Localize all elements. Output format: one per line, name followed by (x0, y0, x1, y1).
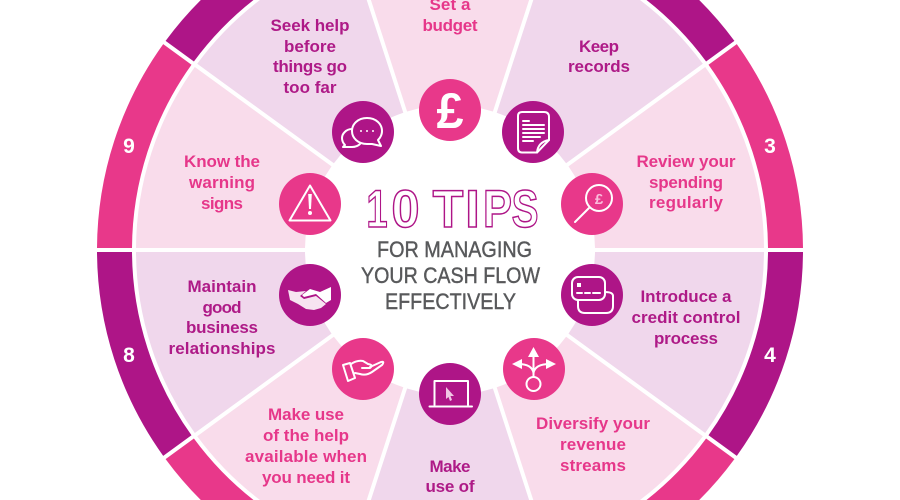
number 3: 3 (764, 135, 776, 158)
panel: tip 2 keep records (497, 0, 734, 163)
icon: warning triangle (279, 173, 341, 235)
text: diversify your revenue streams: revenue (560, 435, 626, 454)
title: 10 tips: 0 (391, 179, 420, 238)
icon: credit cards (561, 264, 623, 326)
panel: tip 9 know the warning signs (97, 44, 341, 248)
title: 10 tips: P (483, 180, 512, 239)
text: keep records: Keep (579, 37, 619, 56)
icon: laptop (419, 363, 481, 425)
panel: tip 8 maintain good business relationships (97, 252, 341, 456)
icon: magnifying glass (561, 173, 623, 235)
text: introduce a credit control process: Introduce a (640, 287, 732, 306)
text: seek help before things go too far: before (284, 37, 336, 56)
text: make use of the help available: available when (245, 447, 367, 466)
title: 10 tips (366, 179, 538, 239)
text: know the warning signs: signs (201, 194, 243, 213)
text: make use of the help available: Make use (268, 405, 344, 424)
icon: diverging arrows (503, 338, 565, 400)
icon: pound sign (419, 79, 481, 141)
icon: speech bubbles (332, 101, 394, 163)
subtitle: YOUR CASH FLOW (361, 263, 540, 288)
text: make use of: use of (426, 477, 475, 496)
number 9: 9 (123, 135, 135, 158)
text: make use of the help available: you need it (262, 468, 350, 487)
title: 10 tips: I (465, 180, 480, 239)
text: introduce a credit control process: credit control (632, 308, 740, 327)
title: 10 tips: S (512, 179, 538, 238)
panel: tip 1 set a budget (371, 0, 529, 141)
text: make use of the help available: of the help (263, 426, 349, 445)
text: review your spending regularly: regularly (649, 193, 724, 212)
subtitle: FOR MANAGING (377, 237, 532, 262)
text: maintain good business relationships: business (186, 318, 258, 337)
number 4: 4 (764, 344, 776, 367)
title: 10 tips: 1 (366, 179, 388, 238)
text: review your spending regularly: spending (649, 173, 723, 192)
text: maintain good business relationships: Maintain (188, 277, 256, 296)
text: maintain good business relationships: relationships (168, 339, 276, 358)
icon: open hand (332, 338, 394, 400)
text: know the warning signs: warning (188, 173, 255, 192)
text: keep records: records (568, 57, 630, 76)
title: 10 tips: T (433, 179, 464, 238)
text: seek help before things go too far: Seek help (270, 16, 350, 35)
text: seek help before things go too far: things go (273, 57, 347, 76)
panel: tip 3 review your spending (561, 44, 803, 248)
text: know the warning signs: Know the (184, 152, 260, 171)
text: diversify your revenue streams: Diversify your (536, 414, 650, 433)
panel: tip 5 diversify (497, 337, 734, 500)
text: introduce a credit control process: process (654, 329, 718, 348)
text: maintain good business relationships: good (202, 298, 242, 317)
text: review your spending regularly: Review your (636, 152, 736, 171)
text: make use of: Make (430, 457, 470, 476)
panel: tip 7 make use of the help (166, 337, 403, 500)
icon: magnifying glass: £ (595, 191, 604, 208)
text: set a budget: budget (422, 16, 478, 35)
panel: tip 10 seek help (166, 0, 403, 163)
icon: pound sign: £ (436, 83, 464, 139)
subtitle: EFFECTIVELY (385, 289, 516, 314)
panel: tip 6 make use of (371, 363, 529, 500)
text: seek help before things go too far: too far (284, 78, 337, 97)
panel: tip 4 credit control (561, 252, 803, 456)
icon: document (502, 101, 564, 163)
number 8: 8 (123, 344, 135, 367)
icon: handshake (279, 264, 341, 326)
text: diversify your revenue streams: streams (560, 456, 626, 475)
